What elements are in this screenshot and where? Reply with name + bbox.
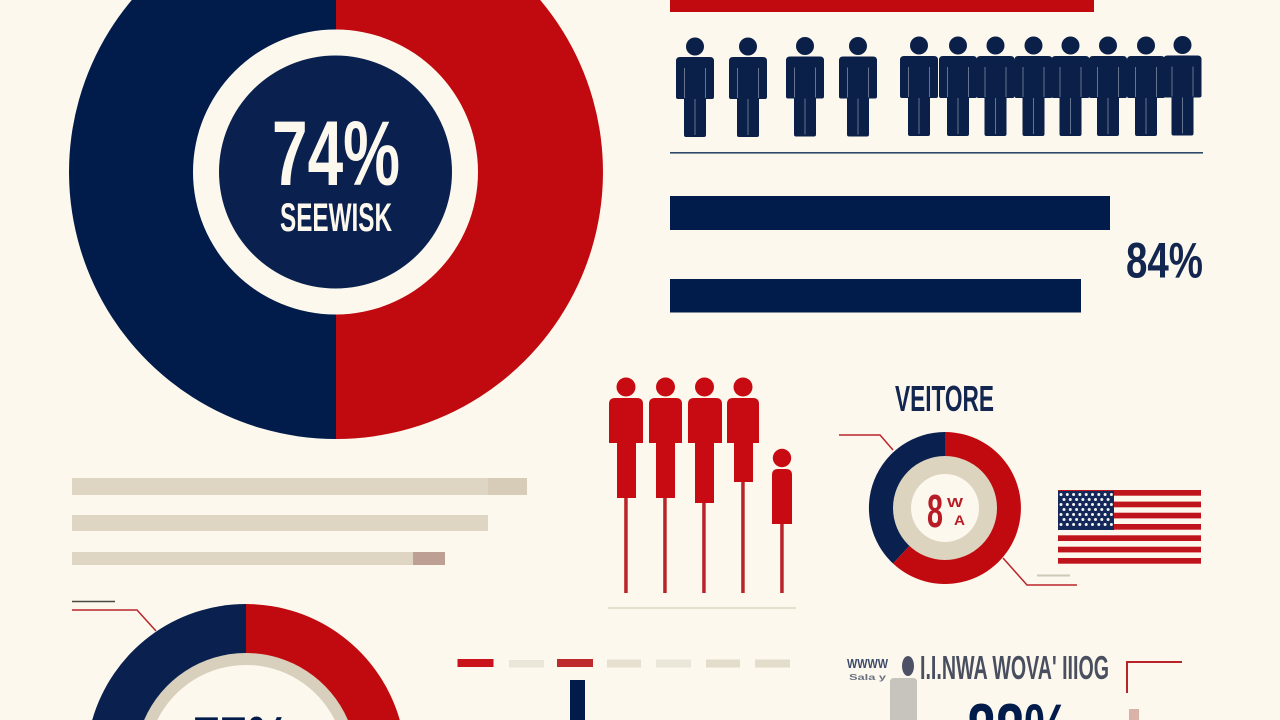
beige bar chart <box>72 478 527 565</box>
legend dashes <box>458 659 790 668</box>
small caption: WWWW <box>847 656 889 671</box>
caption text: I.I.NWA WOVA' IIIOG <box>920 649 1109 686</box>
red corner callout <box>1127 662 1182 693</box>
main percentage: 74% <box>272 103 400 205</box>
value: 84%: 84% <box>1126 232 1203 288</box>
small icon: bottle <box>1129 709 1139 720</box>
donut chart: small right: A <box>954 512 965 528</box>
donut value: 8 <box>927 485 943 537</box>
donut chart: small right <box>869 432 1021 584</box>
icon row: red people <box>609 378 792 593</box>
heading: small donut: VEITORE <box>895 378 994 419</box>
icon: dark oval <box>902 656 914 676</box>
callout lines: bottom donut <box>72 602 156 631</box>
donut chart: small right: W <box>947 495 964 510</box>
gray column <box>890 678 917 720</box>
main donut label: SEEWISK <box>280 196 392 240</box>
donut chart: main 74% <box>69 0 603 439</box>
donut chart: bottom left <box>92 604 400 720</box>
navy column <box>570 680 585 720</box>
bottom caption <box>847 649 1109 686</box>
bar chart: navy bars <box>670 196 1110 312</box>
callout lines: small donut <box>839 435 1077 585</box>
bottom caption: Sala y <box>849 673 887 682</box>
icon row: navy people <box>676 36 1202 137</box>
top red bar <box>670 0 1094 12</box>
icon: american flag <box>1058 490 1201 564</box>
